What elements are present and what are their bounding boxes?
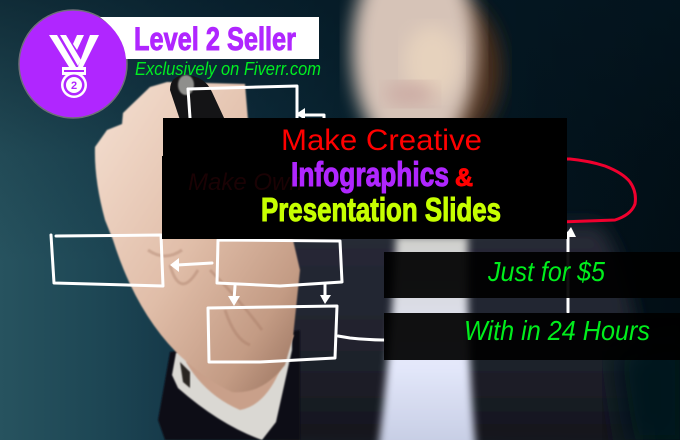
marker pen (170, 75, 225, 120)
price panel (384, 252, 680, 298)
seller banner (100, 17, 319, 59)
title line: Presentation Slides: Presentation Slides (261, 191, 501, 228)
arrowheads (170, 108, 576, 306)
red hand-drawn ellipse (560, 159, 635, 222)
title panel: Make Own (188, 169, 303, 196)
hand and cuff (95, 75, 300, 440)
blurred businessman (270, 0, 680, 440)
title line: Make Creative: Make Creative (281, 124, 482, 157)
icon: medal: 2 (71, 80, 77, 92)
title line: Infographics &: & (455, 164, 473, 192)
tagline: Exclusively on Fiverr.com (135, 59, 321, 79)
title panel (162, 118, 567, 239)
title line: Infographics &: Infographics (291, 156, 449, 194)
delivery text: With in 24 Hours (464, 315, 650, 346)
badge: purple medal circle (19, 10, 127, 118)
price text: Just for $5 (487, 256, 605, 287)
heading: Level 2 Seller: Level 2 Seller (134, 21, 296, 57)
flowchart drawing (51, 86, 568, 362)
delivery panel (384, 313, 680, 360)
